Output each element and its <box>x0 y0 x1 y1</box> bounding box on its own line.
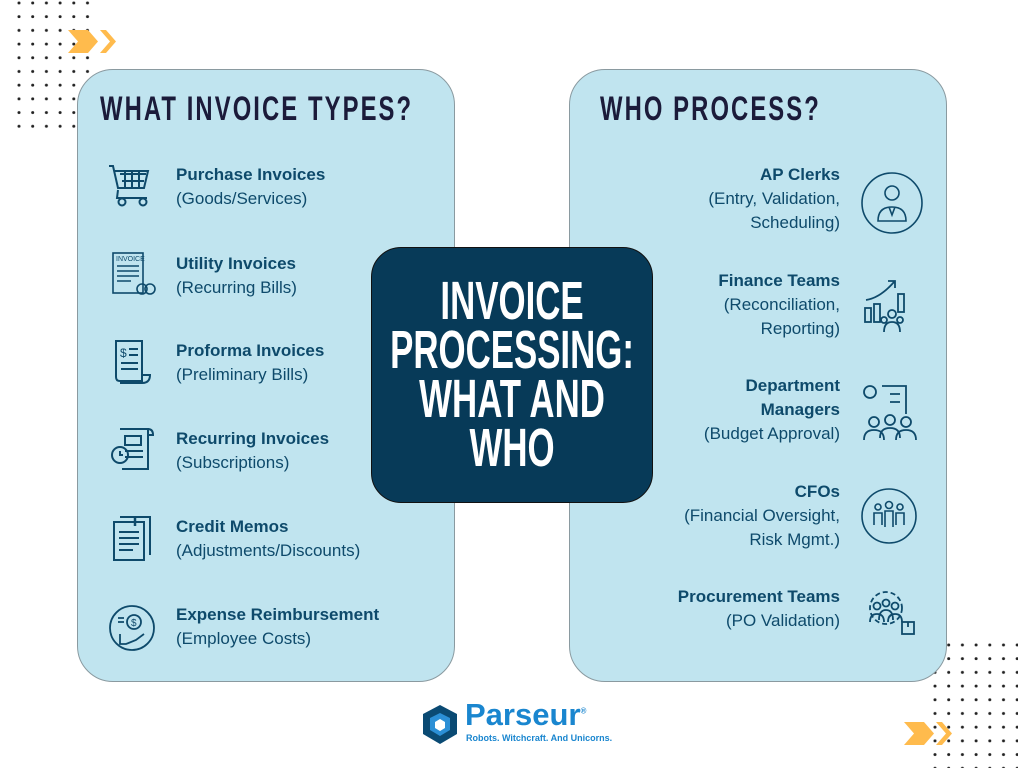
center title box <box>371 247 653 503</box>
item: purchase: Purchase Invoices <box>176 165 325 184</box>
item: purchase: (Goods/Services) <box>176 189 307 208</box>
item: recurring: Recurring Invoices <box>176 429 329 448</box>
item: CFOs: CFOs <box>795 482 840 501</box>
heading: what invoice types: WHAT INVOICE TYPES? <box>100 90 413 128</box>
arrow bottom right <box>904 722 952 745</box>
item: procurement teams: (PO Validation) <box>726 611 840 630</box>
item: CFOs: (Financial Oversight, <box>684 506 840 525</box>
item: procurement teams <box>678 587 840 630</box>
logo: Parseur <box>423 697 612 744</box>
item: AP clerks <box>708 165 840 232</box>
item: CFOs <box>684 482 840 549</box>
item: credit memos: Credit Memos <box>176 517 288 536</box>
icon: managers <box>863 385 917 440</box>
item: department managers: Department <box>746 376 840 395</box>
panel: invoice types <box>77 69 455 682</box>
item: finance teams: (Reconciliation, <box>724 295 840 314</box>
icon: utility <box>112 252 156 295</box>
title <box>390 271 634 478</box>
item: credit memos: (Adjustments/Discounts) <box>176 541 360 560</box>
item: finance teams <box>718 271 840 338</box>
decorative dots top-left <box>17 1 90 128</box>
item: utility: Utility Invoices <box>176 254 296 273</box>
icon: utility: INVOICE <box>116 256 145 263</box>
item: CFOs: Risk Mgmt.) <box>749 530 840 549</box>
icon: expense <box>109 605 155 651</box>
title: INVOICE <box>440 271 584 331</box>
icon: cart <box>109 165 150 206</box>
panel: who process <box>569 69 947 682</box>
item: proforma <box>176 341 324 384</box>
item: department managers: Managers <box>761 400 840 419</box>
item: department managers <box>704 376 840 443</box>
title: WHO <box>469 418 555 478</box>
item: expense: Expense Reimbursement <box>176 605 379 624</box>
item: procurement teams: Procurement Teams <box>678 587 840 606</box>
title: PROCESSING: <box>390 320 634 380</box>
icon: proforma <box>115 340 151 384</box>
item: recurring: (Subscriptions) <box>176 453 289 472</box>
title: WHAT AND <box>419 369 605 429</box>
item: finance teams: Finance Teams <box>718 271 840 290</box>
item: department managers: (Budget Approval) <box>704 424 840 443</box>
item: proforma: Proforma Invoices <box>176 341 324 360</box>
item: AP clerks: Scheduling) <box>750 213 840 232</box>
icon: clerk <box>861 172 923 234</box>
icon: CFOs <box>861 488 917 544</box>
icon: credit memo <box>113 516 151 561</box>
item: finance teams: Reporting) <box>761 319 840 338</box>
item: utility: (Recurring Bills) <box>176 278 297 297</box>
item: proforma: (Preliminary Bills) <box>176 365 308 384</box>
logo: Parseur: Parseur® <box>465 697 586 732</box>
logo: Parseur: Robots. Witchcraft. And Unicorns. <box>466 733 612 743</box>
item: AP clerks: AP Clerks <box>760 165 840 184</box>
icon: proforma: $ <box>120 346 127 360</box>
heading: who process: WHO PROCESS? <box>600 90 821 128</box>
decorative dots bottom-right <box>933 643 1018 768</box>
item: expense <box>176 605 379 648</box>
item: credit memos <box>176 517 360 560</box>
arrows top <box>68 30 116 53</box>
icon: recurring <box>111 428 154 470</box>
item: purchase <box>176 165 325 208</box>
icon: procurement <box>869 591 915 635</box>
item: utility <box>176 254 297 297</box>
icon: finance <box>864 280 905 332</box>
item: expense: (Employee Costs) <box>176 629 311 648</box>
item: AP clerks: (Entry, Validation, <box>708 189 840 208</box>
icon: expense: $ <box>131 618 137 629</box>
item: recurring <box>176 429 329 472</box>
